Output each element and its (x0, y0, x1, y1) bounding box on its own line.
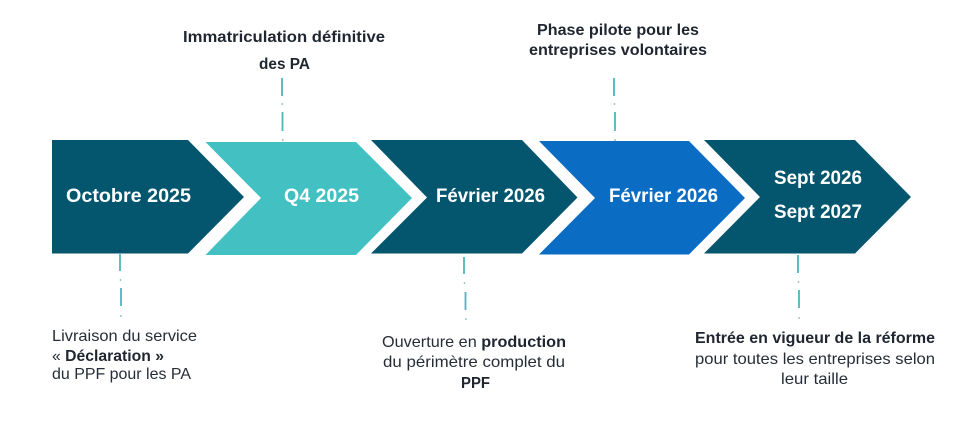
chevron: Février 2026 pilote (539, 141, 745, 254)
text: Livraison du service: « Déclaration » (52, 348, 164, 365)
connector: Phase pilote (614, 78, 616, 141)
text: Livraison du service: Livraison du service (52, 328, 197, 345)
connector: Ouverture (464, 257, 467, 320)
text: Ouverture en production: du périmètre complet du (383, 354, 565, 371)
chevron: Octobre 2025 (52, 140, 244, 254)
chevron: Sept 2026 / Sept 2027: Sept 2027 (774, 202, 862, 223)
chevron: Octobre 2025: Octobre 2025 (66, 186, 191, 207)
chevron: Février 2026 pilote: Février 2026 (609, 186, 718, 207)
text: Immatriculation définitive des PA: des PA (259, 56, 310, 73)
chevron: Q4 2025: Q4 2025 (284, 186, 359, 207)
text: Livraison du service (52, 328, 197, 383)
text: Entrée en vigueur: pour toutes les entreprises selon (695, 351, 935, 368)
connector: Entrée en vigueur (798, 255, 800, 319)
text: Entrée en vigueur: Entrée en vigueur de la réforme (695, 330, 935, 347)
connector: Immatriculation (281, 78, 284, 141)
chevron: Sept 2026 / Sept 2027: Sept 2026 (774, 168, 862, 189)
text: Entrée en vigueur: leur taille (781, 371, 848, 388)
text: Livraison du service: du PPF pour les PA (52, 366, 191, 383)
chevron: Février 2026 production (371, 140, 578, 254)
chevron: Q4 2025 (206, 142, 412, 255)
text: Ouverture en production (382, 334, 566, 392)
text: Phase pilote: Phase pilote pour les (537, 22, 699, 39)
text: Ouverture en production: Ouverture en production (382, 334, 566, 351)
chevron: Février 2026 production: Février 2026 (436, 186, 545, 207)
chevron: Sept 2026 / Sept 2027 (704, 140, 911, 254)
text: Immatriculation définitive des PA (183, 29, 385, 73)
text: Entrée en vigueur (695, 330, 935, 388)
text: Immatriculation définitive des PA: Immatriculation définitive (183, 29, 385, 46)
connector: Livraison (120, 254, 122, 317)
text: Ouverture en production: PPF (461, 375, 490, 392)
text: Phase pilote (529, 22, 707, 59)
text: Phase pilote: entreprises volontaires (529, 42, 707, 59)
